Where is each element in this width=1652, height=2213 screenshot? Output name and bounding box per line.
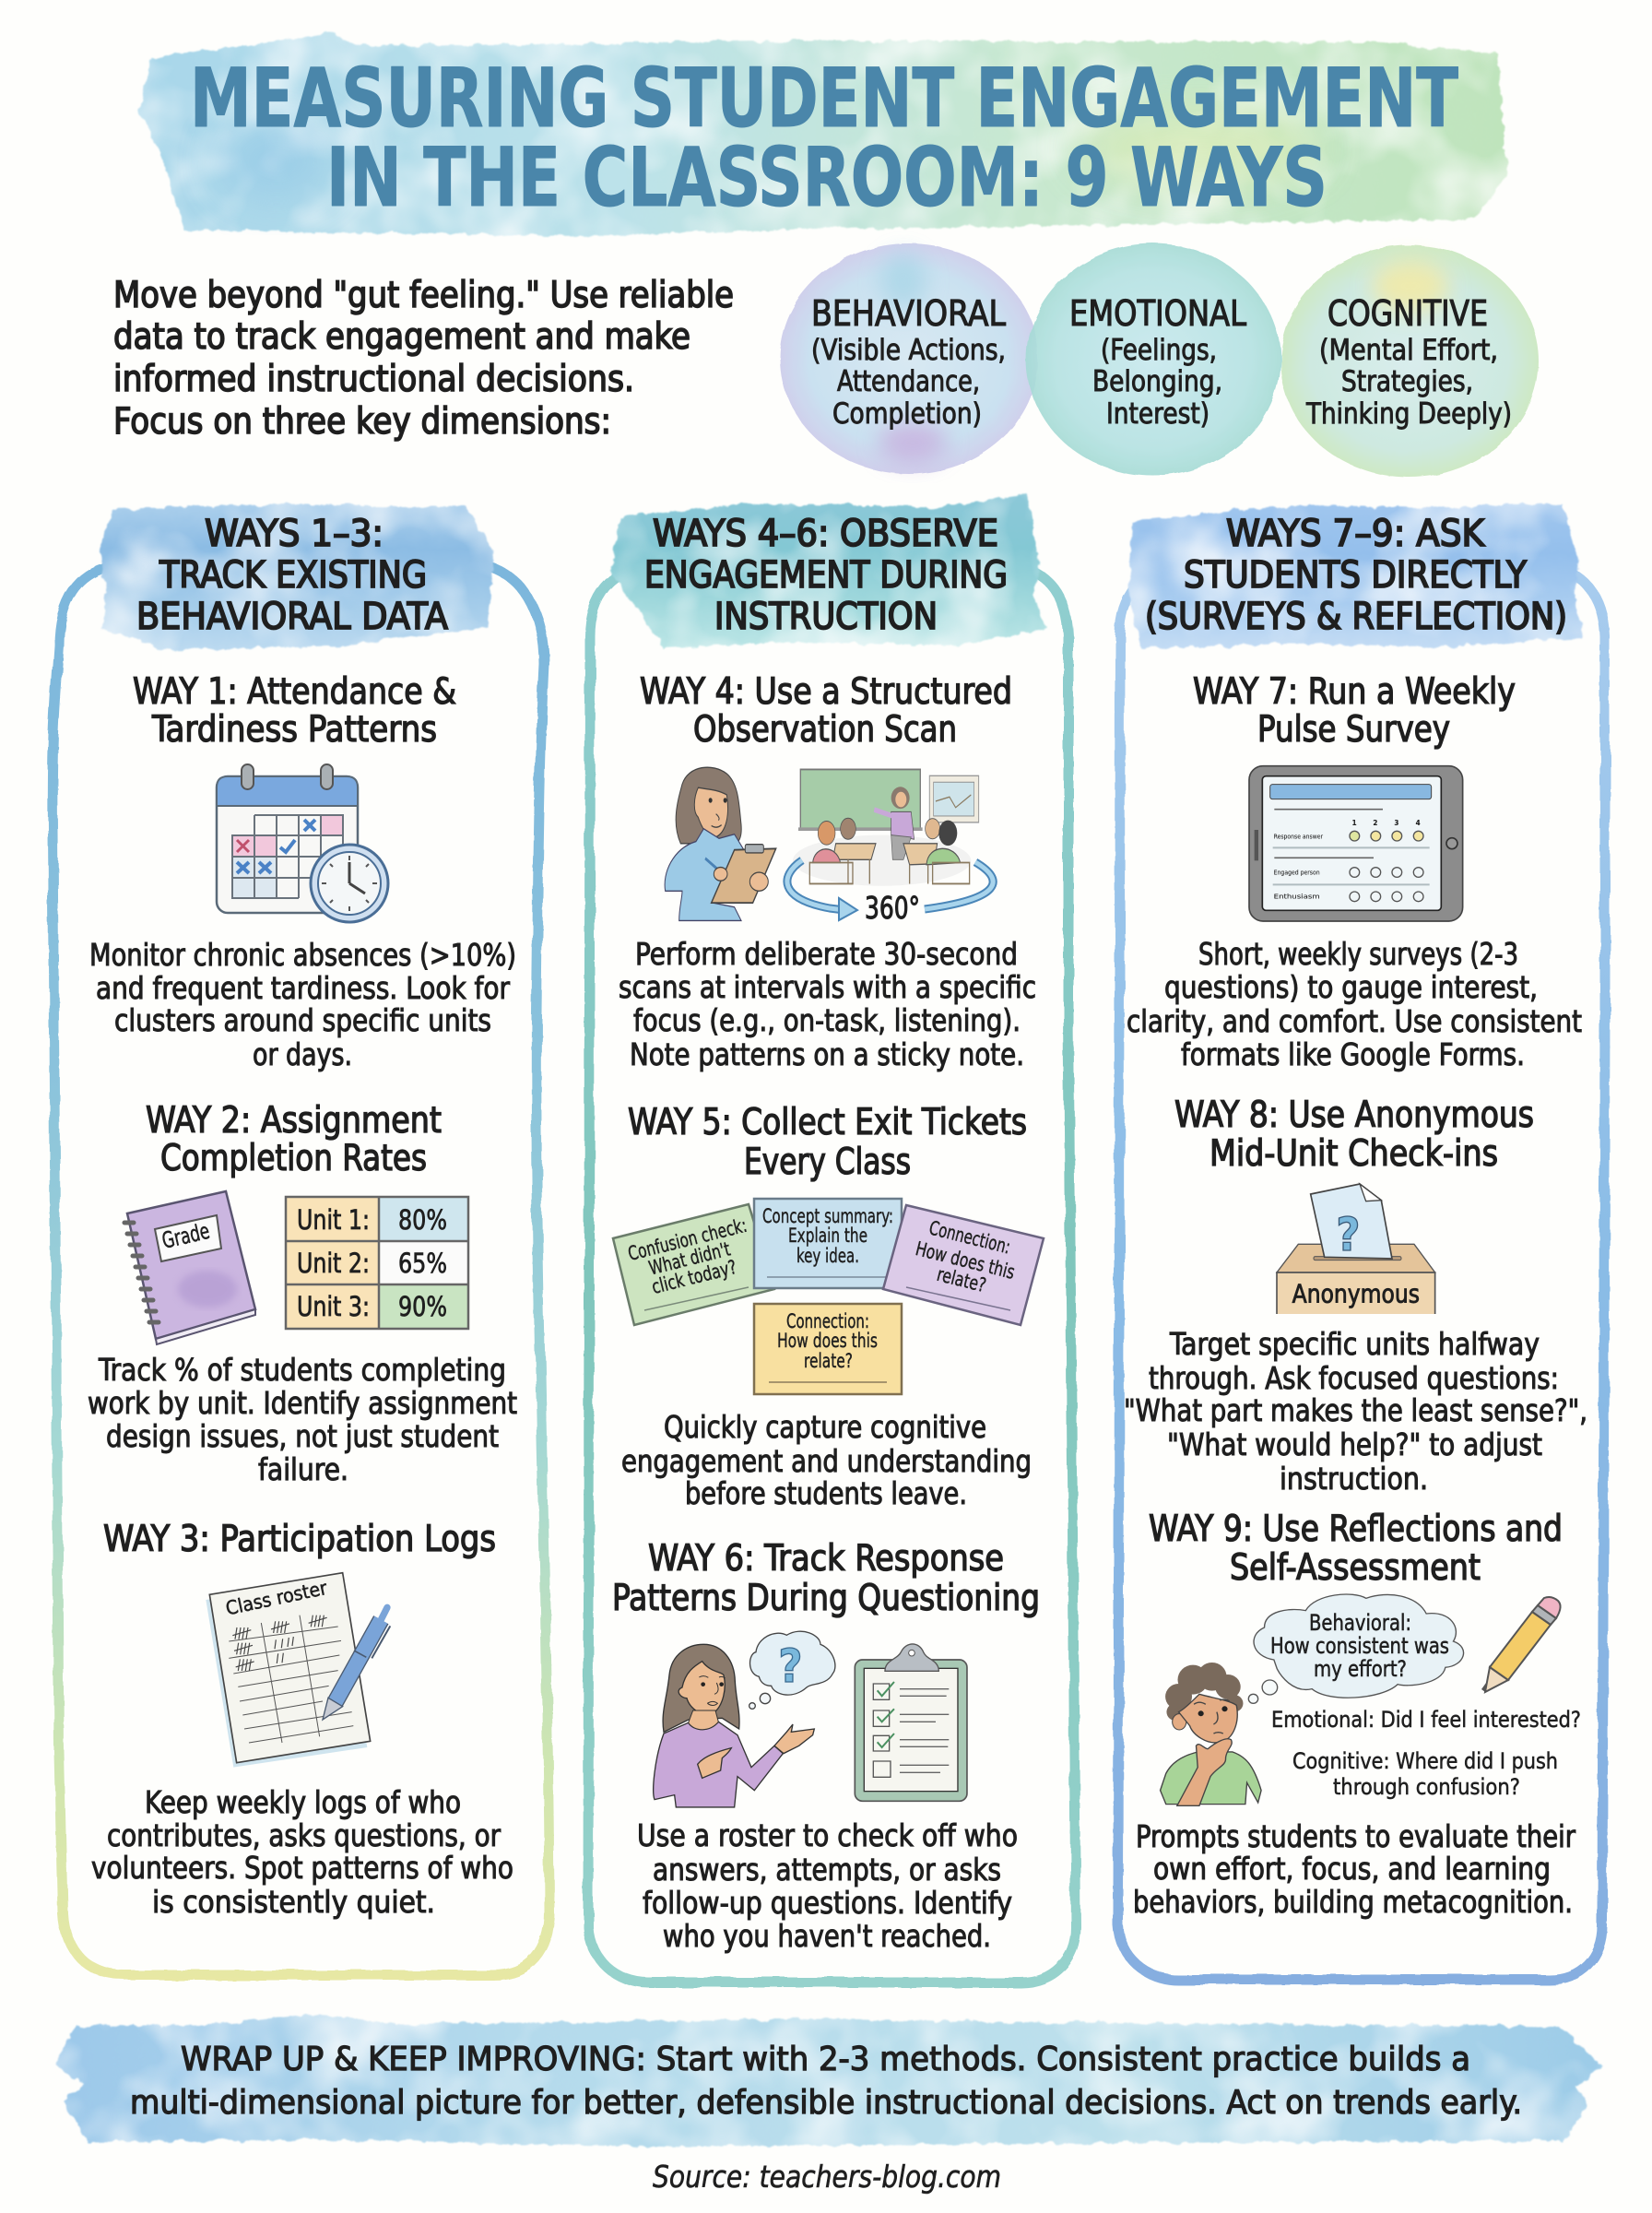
way 6 text: follow-up questions. Identify (643, 1885, 1012, 1921)
icon: tablet survey: Response answer (1274, 832, 1323, 840)
title banner (138, 33, 1506, 236)
way 8 text: through. Ask focused questions: (1149, 1360, 1559, 1396)
circle: emotional: Belonging, (1092, 365, 1222, 398)
way 3 text (91, 1784, 513, 1920)
way 5 text: Quickly capture cognitive (664, 1409, 986, 1445)
way 4 text: Perform deliberate 30-second (635, 936, 1018, 972)
card: connection yellow: How does this (777, 1330, 878, 1352)
icon: grade notebook (124, 1191, 255, 1344)
wrap up text (130, 2041, 1522, 2122)
way 3 text: Keep weekly logs of who (145, 1784, 461, 1820)
circle: emotional: EMOTIONAL (1069, 293, 1246, 334)
way 2 text: design issues, not just student (106, 1418, 499, 1454)
way 9 text: behaviors, building metacognition. (1133, 1884, 1573, 1920)
way 1 text: or days. (253, 1036, 352, 1072)
way 1 text (89, 937, 516, 1072)
way 8 text: "What part makes the least sense?", (1124, 1392, 1587, 1428)
icon: tablet survey: 1 (1352, 819, 1357, 827)
card: connection yellow: Connection: (786, 1310, 869, 1332)
icon: anonymous ballot box: ? (1336, 1208, 1360, 1261)
intro text: data to track engagement and make (113, 316, 690, 358)
way 8 text (1124, 1326, 1587, 1497)
way 7 text: formats like Google Forms. (1181, 1036, 1525, 1072)
way 7 text: questions) to gauge interest, (1164, 969, 1538, 1005)
table: unit completion rates: Unit 1: (297, 1204, 370, 1236)
icon: tablet survey: Engaged person (1274, 869, 1320, 877)
circle: behavioral: Completion) (832, 397, 982, 431)
intro text (113, 275, 734, 443)
card: concept summary (754, 1199, 902, 1288)
way 3 text: is consistently quiet. (152, 1884, 435, 1920)
source line: Source: teachers-blog.com (653, 2159, 1001, 2195)
way 4 heading (640, 671, 1012, 751)
way 5 text (621, 1409, 1032, 1511)
way 8 text: "What would help?" to adjust (1167, 1426, 1542, 1462)
icon: grade notebook: Grade (159, 1218, 212, 1254)
circle: behavioral: (Visible Actions, (811, 334, 1006, 367)
card: connection purple: relate? (935, 1263, 988, 1296)
way 6 text: Use a roster to check off who (637, 1817, 1018, 1853)
icon: tablet survey (1249, 766, 1463, 921)
wrap up text: WRAP UP & KEEP IMPROVING: Start with 2-3 methods. Consistent practice builds a (181, 2041, 1470, 2078)
way 6 text: who you haven't reached. (663, 1918, 991, 1954)
card: confusion check: click today? (649, 1256, 739, 1298)
wrap up banner (53, 2015, 1602, 2147)
panel: ways 7-9 (1118, 503, 1605, 1980)
card: connection yellow (754, 1304, 902, 1394)
way 8 heading (1174, 1095, 1534, 1175)
way 8 heading: Mid-Unit Check-ins (1210, 1133, 1498, 1175)
circle: behavioral: BEHAVIORAL (811, 293, 1006, 334)
icon: anonymous ballot box (1277, 1184, 1435, 1314)
icon: thinking student with prompts: Behavioral: (1309, 1610, 1411, 1636)
table: unit completion rates (286, 1197, 468, 1329)
icon: tablet survey: 2 (1373, 819, 1377, 827)
way 2 text: failure. (258, 1451, 348, 1487)
icon: anonymous ballot box: Anonymous (1292, 1279, 1420, 1309)
card: confusion check (613, 1204, 774, 1325)
panel heading: ways 1-3: TRACK EXISTING (159, 554, 427, 597)
title text (190, 51, 1458, 225)
icon: thinking student with prompts: Emotional: Did I feel interested? (1271, 1707, 1581, 1733)
table: unit completion rates: 90% (398, 1291, 447, 1322)
way 4 heading: WAY 4: Use a Structured (640, 671, 1012, 713)
icon: thinking student with prompts: my effort? (1314, 1656, 1407, 1682)
way 4 text: focus (e.g., on-task, listening). (633, 1002, 1021, 1038)
way 5 text: engagement and understanding (621, 1443, 1032, 1479)
icon: tablet survey: 4 (1416, 819, 1421, 827)
panel heading: ways 7-9: WAYS 7–9: ASK (1226, 513, 1485, 555)
way 4 text: scans at intervals with a specific (619, 969, 1036, 1005)
icon: class roster and pen: Class roster (224, 1577, 329, 1620)
way 9 text: Prompts students to evaluate their (1136, 1818, 1576, 1854)
panel heading: ways 4-6: ENGAGEMENT DURING (644, 554, 1008, 597)
icon: thinking student with prompts (1161, 1594, 1581, 1805)
way 3 text: contributes, asks questions, or (107, 1817, 502, 1853)
panel heading: ways 4-6: WAYS 4–6: OBSERVE (653, 513, 998, 555)
way 8 text: Target specific units halfway (1169, 1326, 1540, 1362)
way 8 text: instruction. (1280, 1461, 1428, 1497)
card: concept summary: Explain the (788, 1225, 867, 1247)
table: unit completion rates: 80% (398, 1204, 447, 1236)
way 7 heading: WAY 7: Run a Weekly (1193, 671, 1516, 713)
way 6 heading (612, 1538, 1040, 1619)
way 5 text: before students leave. (685, 1475, 967, 1511)
icon: tablet survey: 3 (1394, 819, 1398, 827)
icon: thinking student with prompts: through confusion? (1333, 1774, 1520, 1800)
icon: tablet survey: Enthusiasm (1274, 893, 1320, 900)
table: unit completion rates: Unit 3: (297, 1291, 370, 1322)
panel heading: ways 1-3: BEHAVIORAL DATA (136, 596, 448, 638)
card: connection purple: Connection: (926, 1216, 1013, 1259)
title text: MEASURING STUDENT ENGAGEMENT (190, 51, 1458, 146)
circle: cognitive: Strategies, (1341, 365, 1473, 398)
icon: thinking student with prompts: Cognitive: Where did I push (1292, 1748, 1558, 1774)
card: concept summary: Concept summary: (762, 1205, 893, 1227)
way 2 heading (146, 1100, 442, 1179)
circle: emotional: Interest) (1106, 397, 1210, 431)
way 4 text: Note patterns on a sticky note. (630, 1036, 1024, 1072)
way 9 text (1133, 1818, 1576, 1920)
way 3 heading: WAY 3: Participation Logs (103, 1519, 496, 1560)
way 4 text (619, 936, 1036, 1072)
icon: teacher observing classroom: 360° (865, 890, 920, 926)
panel heading: ways 7-9: (SURVEYS & REFLECTION) (1145, 596, 1567, 638)
panel heading: ways 1-3: WAYS 1–3: (205, 513, 384, 555)
panel: ways 4-6 (588, 494, 1076, 1982)
icon: thinking student with prompts: How consistent was (1270, 1633, 1449, 1659)
title text: IN THE CLASSROOM: 9 WAYS (326, 130, 1328, 225)
wrap up text: multi-dimensional picture for better, defensible instructional decisions. Act on trends early. (130, 2084, 1522, 2122)
way 3 text: volunteers. Spot patterns of who (91, 1850, 513, 1886)
way 9 text: own effort, focus, and learning (1153, 1851, 1551, 1887)
way 1 heading: WAY 1: Attendance & (133, 671, 456, 713)
circle: emotional (1026, 243, 1280, 476)
way 2 text (88, 1352, 517, 1487)
way 6 text (637, 1817, 1018, 1954)
dimension circles (780, 243, 1539, 478)
circle: cognitive: Thinking Deeply) (1305, 397, 1512, 431)
panel heading: ways 4-6: INSTRUCTION (714, 596, 938, 638)
way 1 text: and frequent tardiness. Look for (96, 970, 511, 1006)
way 5 heading (628, 1102, 1027, 1183)
way 9 heading (1149, 1509, 1563, 1589)
way 2 text: Track % of students completing (98, 1352, 506, 1388)
way 2 heading: WAY 2: Assignment (146, 1100, 442, 1142)
icon: questioning teacher and checklist: ? (778, 1639, 802, 1693)
way 2 text: work by unit. Identify assignment (88, 1385, 517, 1421)
way 6 heading: Patterns During Questioning (612, 1578, 1040, 1619)
panel heading: ways 4-6 (612, 494, 1046, 648)
way 1 text: clusters around specific units (114, 1002, 491, 1038)
way 7 text: clarity, and comfort. Use consistent (1127, 1003, 1582, 1039)
panel heading: ways 7-9: STUDENTS DIRECTLY (1184, 554, 1528, 597)
circle: cognitive: COGNITIVE (1328, 293, 1488, 334)
intro text: Focus on three key dimensions: (113, 401, 611, 443)
circle: behavioral (780, 243, 1038, 474)
table: unit completion rates: 65% (398, 1248, 447, 1279)
way 7 text (1127, 936, 1582, 1072)
way 2 heading: Completion Rates (160, 1138, 427, 1179)
way 5 heading: Every Class (744, 1142, 911, 1183)
way 4 heading: Observation Scan (693, 709, 957, 751)
way 7 heading: Pulse Survey (1257, 709, 1450, 751)
way 6 text: answers, attempts, or asks (653, 1852, 1001, 1888)
icon: calendar and clock (217, 764, 388, 922)
circle: cognitive (1280, 245, 1539, 478)
way 7 text: Short, weekly surveys (2-3 (1198, 936, 1518, 972)
way 9 heading: Self-Assessment (1230, 1547, 1481, 1589)
panel heading: ways 1-3 (100, 504, 494, 650)
exit ticket cards (613, 1199, 1044, 1394)
card: connection purple (883, 1205, 1044, 1325)
card: connection yellow: relate? (804, 1350, 853, 1372)
circle: emotional: (Feelings, (1101, 334, 1217, 367)
icon: questioning teacher and checklist (654, 1631, 967, 1807)
circle: cognitive: (Mental Effort, (1319, 334, 1498, 367)
way 1 heading (133, 671, 456, 751)
card: confusion check: Confusion check: (626, 1214, 749, 1265)
way 1 text: Monitor chronic absences (>10%) (89, 937, 516, 973)
card: confusion check: What didn't (646, 1237, 733, 1280)
way 7 heading (1193, 671, 1516, 751)
way 8 heading: WAY 8: Use Anonymous (1174, 1095, 1534, 1136)
panel heading: ways 7-9 (1128, 503, 1584, 648)
intro text: informed instructional decisions. (113, 359, 634, 400)
table: unit completion rates: Unit 2: (297, 1248, 370, 1279)
panel: ways 1-3 (53, 504, 549, 1975)
way 9 heading: WAY 9: Use Reflections and (1149, 1509, 1563, 1550)
way 6 heading: WAY 6: Track Response (648, 1538, 1004, 1580)
way 5 heading: WAY 5: Collect Exit Tickets (628, 1102, 1027, 1143)
icon: teacher observing classroom (665, 767, 993, 926)
intro text: Move beyond "gut feeling." Use reliable (113, 275, 734, 316)
circle: behavioral: Attendance, (837, 365, 980, 398)
icon: class roster and pen (206, 1573, 390, 1768)
card: concept summary: key idea. (796, 1245, 859, 1267)
card: connection purple: How does this (914, 1237, 1017, 1284)
way 1 heading: Tardiness Patterns (151, 709, 437, 751)
